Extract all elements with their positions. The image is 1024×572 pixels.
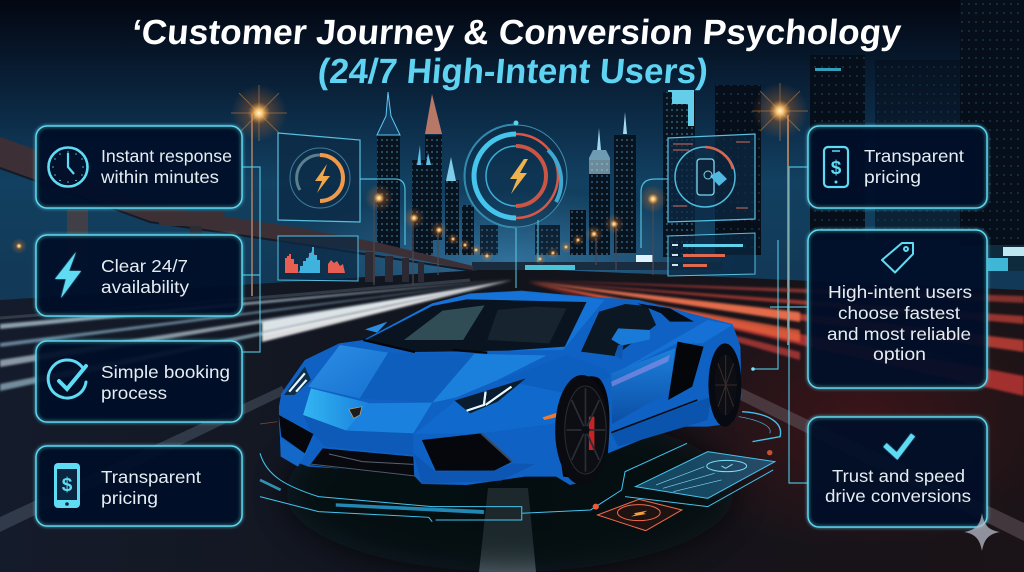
side door and flank xyxy=(611,348,675,424)
side window xyxy=(581,304,656,356)
watermark sparkle xyxy=(964,513,1000,551)
road markings xyxy=(0,385,1024,572)
rear wheel xyxy=(708,343,741,427)
label: High-intent users xyxy=(828,282,972,302)
red light trails xyxy=(528,280,1024,396)
panel: transparent pricing left xyxy=(36,446,242,526)
mirrors xyxy=(611,328,650,346)
horizon bridge xyxy=(472,262,722,270)
street lamps xyxy=(11,83,808,345)
label: Instant response xyxy=(101,146,232,166)
panel: instant response xyxy=(36,126,242,208)
HUD panel: energy gauge xyxy=(278,133,360,222)
panel: transparent pricing right xyxy=(808,126,987,208)
label: option xyxy=(873,344,926,364)
icon: phone with dollar: $ xyxy=(62,475,73,496)
elevated overpass xyxy=(0,137,473,282)
subtitle: (24/7 High-Intent Users) xyxy=(316,52,710,91)
panel: trust and speed xyxy=(808,417,987,527)
sports car xyxy=(279,291,741,485)
car shadow xyxy=(285,412,735,572)
panel: simple booking xyxy=(36,341,242,422)
label: and most reliable xyxy=(827,324,971,344)
panel: simple booking: process xyxy=(101,383,167,403)
HUD panel: bar chart xyxy=(278,236,358,281)
fender xyxy=(414,379,565,434)
road reflected glow xyxy=(650,290,1024,550)
floor HUD graphics under the car xyxy=(260,412,781,531)
panel: 24/7 availability: availability xyxy=(101,277,189,297)
icon: lightning bolt xyxy=(55,252,81,298)
right connector lines xyxy=(770,167,808,483)
icon: phone with dollar outline: $ xyxy=(831,158,842,179)
label: Transparent xyxy=(864,146,964,166)
background: night sky xyxy=(0,0,1024,300)
badge xyxy=(349,407,362,418)
white light trails xyxy=(0,279,512,391)
front intakes xyxy=(279,415,313,453)
panel: high-intent users xyxy=(808,230,987,388)
panel: transparent pricing left: pricing xyxy=(101,488,158,508)
central speed gauge xyxy=(464,120,567,288)
car body xyxy=(279,291,741,485)
HUD panel: progress bars xyxy=(668,233,755,276)
icon: phone with dollar xyxy=(54,463,80,508)
skyline: distant city towers xyxy=(280,0,1024,330)
front wheel xyxy=(555,375,609,485)
icon: check mark xyxy=(885,435,913,456)
icon: check circle xyxy=(48,360,86,398)
label: Simple booking xyxy=(101,362,230,382)
label: Clear 24/7 xyxy=(101,256,188,276)
title: ‘Customer Journey & Conversion Psychology xyxy=(130,13,903,52)
panel: instant response: within minutes xyxy=(100,167,219,187)
headlights xyxy=(455,378,526,413)
panel: 24/7 availability xyxy=(36,235,242,316)
icon: phone with dollar outline xyxy=(824,147,848,187)
label: choose fastest xyxy=(838,303,960,323)
roof edge xyxy=(370,291,604,352)
hood facets xyxy=(308,345,388,398)
right side car connector xyxy=(751,240,778,371)
wiper blades xyxy=(363,340,487,353)
HUD connectors xyxy=(360,179,668,248)
icon: price tag xyxy=(882,243,913,272)
HUD panel: phone payment xyxy=(668,134,755,222)
windshield xyxy=(366,299,586,352)
left connector lines xyxy=(242,167,260,352)
side air intake xyxy=(668,342,704,400)
guard rail xyxy=(0,280,470,318)
icon: clock xyxy=(48,148,88,186)
panel: trust and speed: drive conversions xyxy=(825,486,971,506)
label xyxy=(827,282,972,364)
label: Trust and speed xyxy=(832,466,965,486)
label: Transparent xyxy=(101,467,201,487)
lower bumper xyxy=(413,453,536,484)
road xyxy=(0,268,1024,572)
panel: transparent pricing right: pricing xyxy=(864,167,921,187)
title xyxy=(130,13,903,91)
